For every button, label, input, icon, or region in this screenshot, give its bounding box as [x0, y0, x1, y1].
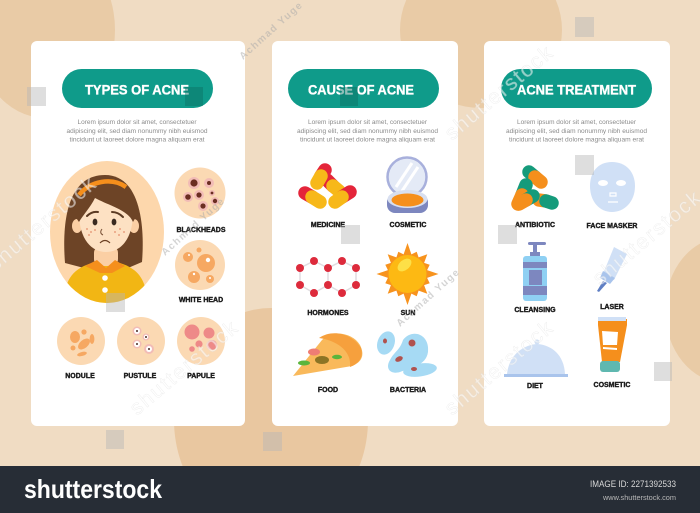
label: white head: WHITE HEAD	[179, 297, 223, 304]
icon: pustule	[117, 317, 165, 365]
label: diet: DIET	[527, 383, 544, 390]
label: cosmetic: COSMETIC	[390, 222, 426, 229]
heading: cause of acne: CAUSE OF ACNE	[308, 82, 414, 98]
label: hormones: HORMONES	[307, 310, 349, 317]
icon: face mask	[590, 162, 635, 212]
icon: nodule	[57, 317, 105, 365]
text block: types intro: tincidunt ut laoreet dolore magna aliquam erat	[70, 136, 205, 144]
icon: medicine capsules	[305, 170, 350, 202]
label: laser: LASER	[600, 304, 624, 311]
icon: cleansing pump bottle	[523, 242, 547, 301]
footer logo: shutterstock	[24, 474, 162, 504]
panel: cause of acne	[272, 41, 458, 426]
icon: bacteria	[374, 329, 438, 379]
icon: antibiotic capsules	[518, 172, 552, 204]
label: pustule: PUSTULE	[124, 373, 157, 380]
text block: types intro: adipiscing elit, sed diam nonummy nibh euismod	[66, 128, 208, 135]
heading: cause of acne	[288, 69, 439, 108]
watermark: Achmad Yuge	[238, 0, 305, 62]
label: food: FOOD	[318, 387, 338, 394]
icon: sun	[376, 243, 438, 305]
icon: white head	[175, 240, 225, 290]
footer bar	[0, 466, 700, 513]
panel: acne treatment	[484, 41, 670, 426]
text block: cause intro: adipiscing elit, sed diam nonummy nibh euismod	[297, 128, 439, 135]
icon: diet cloche	[504, 340, 568, 377]
icon: blackheads	[174, 168, 226, 218]
label: antibiotic: ANTIBIOTIC	[515, 222, 555, 229]
heading: acne treatment: ACNE TREATMENT	[517, 82, 637, 98]
panel: types of acne	[31, 41, 245, 426]
label: nodule: NODULE	[65, 373, 95, 380]
icon: cosmetic tube	[598, 317, 627, 372]
footer website: www.shutterstock.com	[602, 493, 676, 502]
label: face masker: FACE MASKER	[587, 223, 637, 230]
watermark: Achmad Yuge	[160, 196, 227, 258]
label: sun: SUN	[401, 310, 415, 317]
watermark: shutterstock	[440, 316, 557, 420]
text block: treatment intro	[506, 119, 648, 144]
watermark: shutterstock	[125, 316, 242, 420]
footer image id: IMAGE ID: 2271392533	[590, 479, 676, 489]
icon: laser tube	[597, 247, 627, 292]
text block: cause intro: tincidunt ut laoreet dolore magna aliquam erat	[300, 136, 435, 144]
label: cleansing: CLEANSING	[514, 307, 556, 314]
text block: cause intro: Lorem ipsum dolor sit amet, consectetuer	[308, 119, 427, 126]
icon: papule	[177, 317, 225, 365]
heading: types of acne	[62, 69, 213, 108]
heading: types of acne: TYPES OF ACNE	[85, 82, 189, 98]
heading: acne treatment	[501, 69, 652, 108]
text block: types intro: Lorem ipsum dolor sit amet, consectetuer	[78, 119, 196, 126]
text block: treatment intro: Lorem ipsum dolor sit amet, consectetuer	[517, 119, 636, 126]
icon: girl with acne	[50, 161, 164, 303]
icon: food pizza	[293, 333, 362, 376]
label: cosmetic: COSMETIC	[594, 382, 630, 389]
text block: treatment intro: adipiscing elit, sed diam nonummy nibh euismod	[506, 128, 648, 135]
icon: cosmetic compact	[387, 158, 428, 213]
text block: cause intro	[297, 119, 439, 144]
text block: types intro	[66, 119, 208, 144]
text block: treatment intro: tincidunt ut laoreet dolore magna aliquam erat	[509, 136, 644, 144]
label: papule: PAPULE	[187, 373, 215, 380]
watermark: shutterstock	[440, 41, 557, 145]
label: blackheads: BLACKHEADS	[176, 227, 226, 234]
label: bacteria: BACTERIA	[390, 387, 426, 394]
watermark: Achmad Yuge	[395, 267, 462, 329]
label: medicine: MEDICINE	[311, 222, 345, 229]
icon: hormones molecule	[296, 257, 360, 297]
